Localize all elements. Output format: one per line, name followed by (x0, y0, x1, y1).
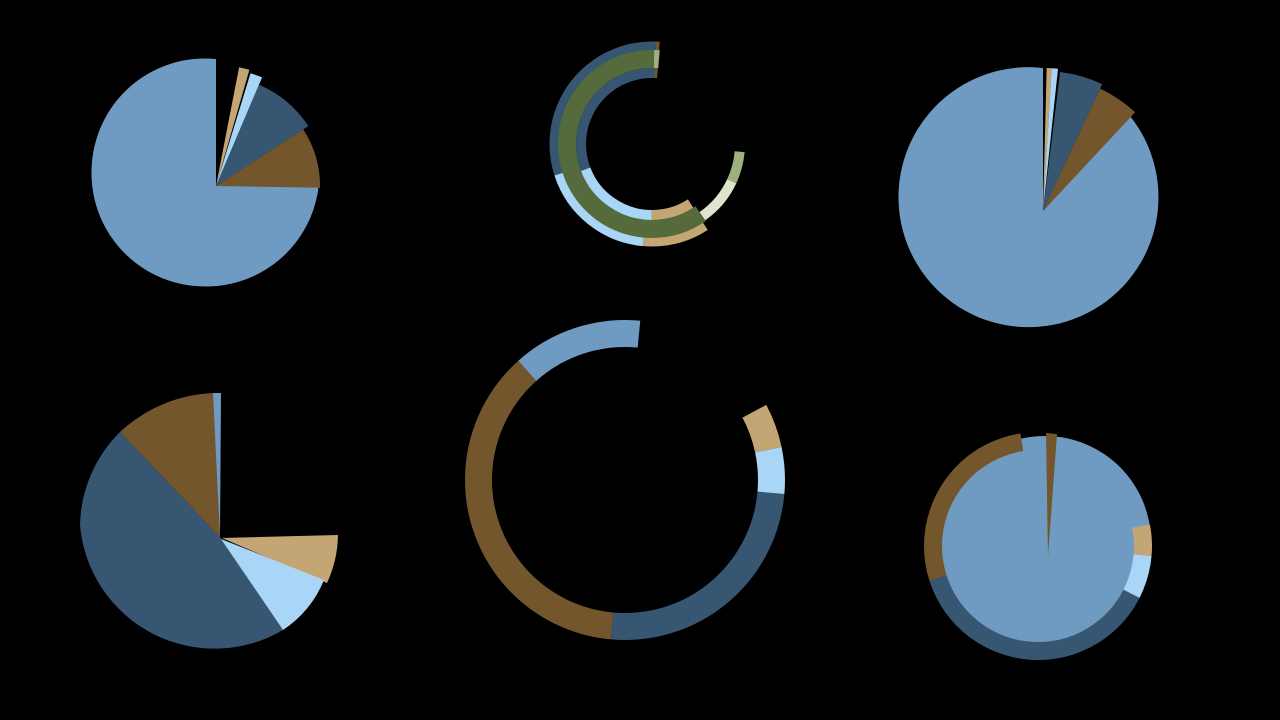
pie chart: top-right (898, 67, 1158, 327)
pie chart: top-left (91, 58, 320, 287)
pie with ring: bottom-right (933, 433, 1151, 651)
multi-ring chart: top-center (554, 46, 750, 242)
ring chart: bottom-center (478, 334, 772, 626)
pie chart: bottom-left (80, 393, 338, 649)
